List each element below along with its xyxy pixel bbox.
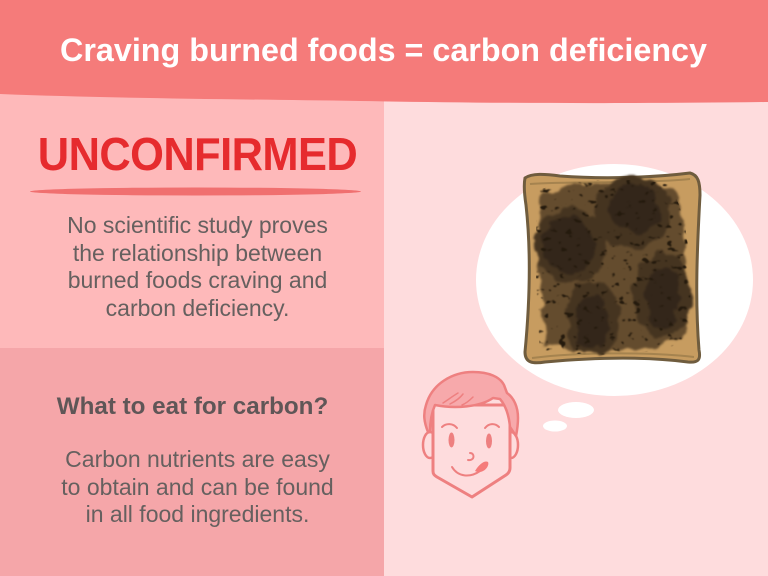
header banner bbox=[0, 0, 768, 104]
hair fringe strokes bbox=[443, 393, 473, 405]
text: verdict explanation: burned foods craving and bbox=[68, 267, 327, 293]
text: verdict explanation: carbon deficiency. bbox=[106, 295, 289, 321]
text: carbon nutrients: Carbon nutrients are easy bbox=[65, 446, 330, 472]
heading: what to eat: What to eat for carbon? bbox=[57, 393, 328, 420]
panel: unconfirmed verdict bbox=[0, 90, 384, 348]
icon: face licking lips bbox=[423, 372, 518, 497]
text: verdict explanation: the relationship between bbox=[73, 240, 322, 266]
thought bubble bbox=[476, 164, 753, 432]
title: Craving burned foods = carbon deficiency bbox=[60, 32, 707, 68]
text: carbon nutrients: to obtain and can be found bbox=[61, 474, 334, 500]
text: verdict explanation: No scientific study proves bbox=[67, 212, 328, 238]
eyebrows, nose and mouth bbox=[442, 424, 499, 476]
illustration: thought bubble with burned toast bbox=[422, 164, 753, 498]
icon: burned toast bbox=[524, 173, 700, 363]
hair bbox=[424, 372, 518, 436]
panel: what to eat bbox=[0, 348, 384, 576]
underline bbox=[30, 188, 361, 196]
text: carbon nutrients: in all food ingredients. bbox=[86, 501, 309, 527]
text: carbon nutrients bbox=[61, 446, 334, 527]
head bbox=[433, 405, 510, 497]
heading: unconfirmed: UNCONFIRMED bbox=[38, 128, 357, 180]
eyes bbox=[448, 432, 492, 448]
tongue bbox=[475, 461, 488, 472]
ears bbox=[423, 432, 518, 458]
text: verdict explanation bbox=[67, 212, 328, 321]
